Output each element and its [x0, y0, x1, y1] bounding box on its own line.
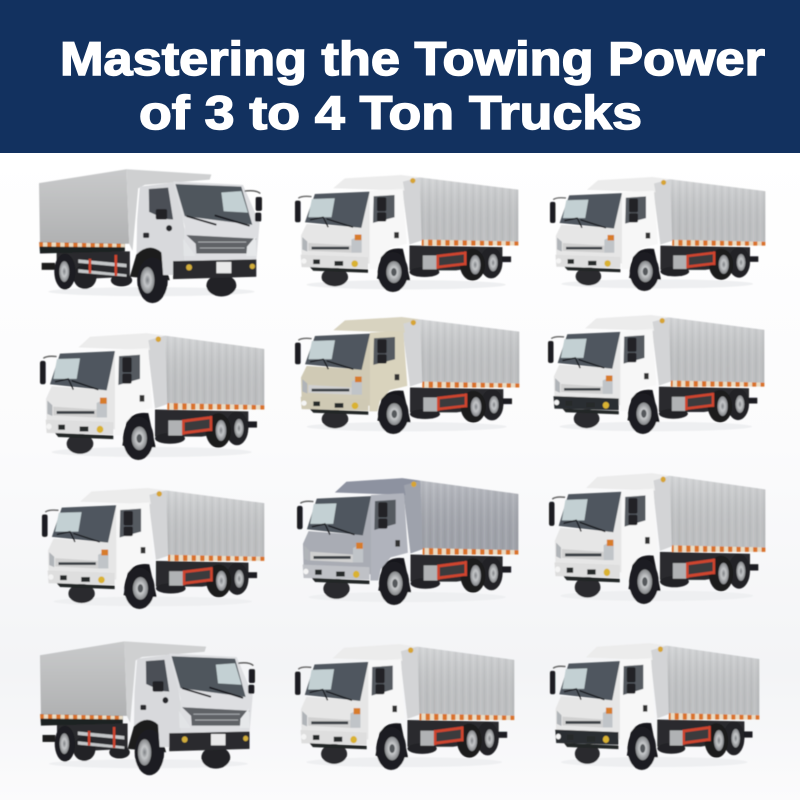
title: of 3 to 4 Ton Trucks — [139, 86, 642, 139]
title: Mastering the Towing Power — [60, 32, 765, 85]
truck: row 3 column 1 — [42, 488, 264, 609]
truck: row 1 column 2 — [295, 175, 518, 292]
truck: row 3 column 2 — [297, 478, 518, 605]
truck: row 4 column 3 — [550, 643, 759, 770]
truck: row 2 column 1 — [40, 333, 264, 460]
truck: row 2 column 3 — [548, 315, 764, 434]
header banner — [0, 0, 800, 153]
title — [60, 32, 765, 139]
truck grid — [39, 169, 765, 775]
truck: row 2 column 2 — [295, 317, 519, 434]
truck: row 1 column 1 — [39, 169, 262, 303]
truck: row 4 column 1 — [40, 641, 255, 775]
truck: row 3 column 3 — [549, 473, 765, 604]
truck: row 4 column 2 — [295, 644, 514, 770]
truck: row 1 column 3 — [550, 177, 765, 291]
